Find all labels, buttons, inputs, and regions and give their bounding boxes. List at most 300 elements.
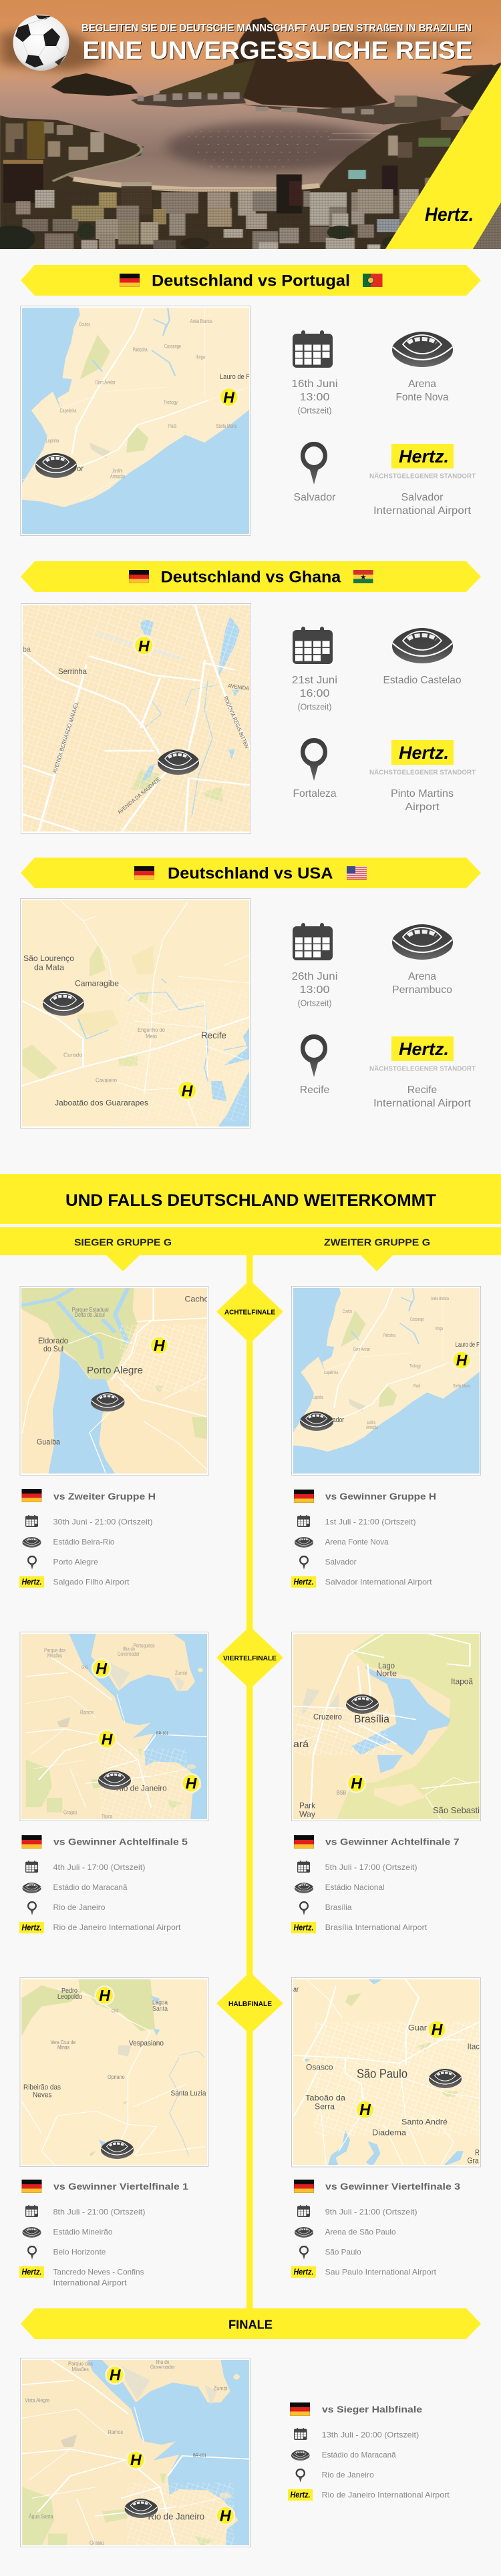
icon: calendar xyxy=(293,330,333,368)
city: Recife xyxy=(300,1084,329,1096)
banner xyxy=(21,265,481,296)
stadium name xyxy=(392,971,452,996)
Hertz logo: Hertz. xyxy=(399,743,449,763)
arrow: right column xyxy=(361,1255,393,1271)
map base Recife: da Mata xyxy=(34,962,64,972)
map base Recife: Camaragibe xyxy=(75,978,119,988)
city: Fortaleza xyxy=(293,788,337,799)
marker: stadium xyxy=(91,1392,124,1411)
Hertz logo: Hertz. xyxy=(290,2489,310,2500)
map base Fortaleza xyxy=(23,605,250,832)
map base Belo Horizonte: CNF xyxy=(112,2009,119,2014)
flag: Ghana xyxy=(353,570,373,583)
hero: Rio de Janeiro photo header xyxy=(0,0,501,252)
round marker: Viertelfinale: VIERTELFINALE xyxy=(223,1654,277,1662)
map base Brasília: Brasília xyxy=(354,1714,389,1725)
map base Salvador small: Itinga xyxy=(436,1327,443,1331)
map base Rio de Janeiro xyxy=(21,1634,207,1819)
panel: map Recife xyxy=(19,898,253,1128)
match heading: Deutschland vs Ghana xyxy=(161,569,341,586)
map base Belo Horizonte: Pedro xyxy=(61,1987,77,1995)
map base Rio de Janeiro: Ilha do xyxy=(123,1646,135,1652)
map base Salvador small: Armação xyxy=(366,1425,378,1430)
marker: stadium xyxy=(300,1411,333,1431)
map base Brasília: Norte xyxy=(376,1668,397,1678)
map base Salvador: Palestina xyxy=(133,347,148,352)
map base Brasília: Lago xyxy=(378,1661,395,1670)
icon: calendar xyxy=(293,627,333,664)
map base Salvador: Lapinha xyxy=(45,438,59,444)
stadium: Estádio do Maracanã xyxy=(322,2450,396,2459)
match details: vs Gewinner Viertelfinale 3 xyxy=(291,2180,460,2278)
flag: Germany xyxy=(294,1490,314,1503)
group winner heading: SIEGER GRUPPE G xyxy=(74,1237,172,1248)
section: Deutschland vs USA xyxy=(19,858,481,1128)
map base Rio de Janeiro Finale: Ramos xyxy=(108,2429,123,2435)
map base Salvador small: Palestina xyxy=(383,1333,395,1338)
date text: (Ortszeit) xyxy=(298,406,331,415)
map base Recife xyxy=(22,900,249,1126)
hero subtitle: BEGLEITEN SIE DIE DEUTSCHE MANNSCHAFT AUF DEN STRAßEN IN BRAZILIEN xyxy=(81,23,472,34)
Hertz wordmark in hero: Hertz. xyxy=(425,204,474,226)
map base Salvador: Coutos xyxy=(79,322,90,327)
marker: Hertz location 3 xyxy=(181,1773,201,1793)
date text: 16th Juni xyxy=(291,378,338,390)
marker: Hertz location 1: H xyxy=(96,1660,107,1677)
flag: Portugal xyxy=(363,274,382,287)
marker: Hertz location: H xyxy=(456,1351,468,1369)
map base Fortaleza: Serrinha xyxy=(58,667,87,676)
map base Rio de Janeiro: Grajaú xyxy=(63,1810,77,1815)
map base Recife: Jaboatão dos Guararapes xyxy=(55,1098,148,1108)
city: Salvador xyxy=(325,1557,357,1566)
map base Porto Alegre: Cacho xyxy=(184,1295,209,1304)
date: 13th Juli - 20:00 (Ortszeit) xyxy=(322,2430,419,2439)
date text xyxy=(291,378,338,415)
banner: Finale: FINALE xyxy=(228,2318,273,2332)
icon: stadium xyxy=(23,1537,41,1548)
map base Rio de Janeiro Finale: BR-101 xyxy=(193,2453,206,2459)
map base Salvador: Itinga xyxy=(196,354,205,360)
map base Rio de Janeiro: Tijuca xyxy=(102,1814,112,1819)
Hertz logo: Hertz. xyxy=(21,2266,41,2277)
airport xyxy=(373,492,472,517)
map base São Paulo: ar xyxy=(293,1986,299,1994)
date: 8th Juli - 21:00 (Ortszeit) xyxy=(53,2207,146,2216)
match title: vs Zweiter Gruppe H xyxy=(53,1491,156,1502)
map base Rio de Janeiro Finale: Zumbi xyxy=(214,2385,228,2392)
map base Belo Horizonte: Opriano xyxy=(108,2074,125,2080)
stadium: Arena de São Paulo xyxy=(325,2227,396,2236)
map base Porto Alegre: Porto Alegre xyxy=(87,1365,143,1376)
airport: Tancredo Neves - Confins xyxy=(53,2267,144,2276)
date: 9th Juli - 21:00 (Ortszeit) xyxy=(325,2207,418,2216)
marker: Hertz location xyxy=(176,1080,198,1101)
icon: calendar xyxy=(297,1861,310,1873)
marker: stadium xyxy=(98,1770,131,1790)
hero scene illustration xyxy=(0,0,501,249)
marker: stadium xyxy=(101,2140,134,2159)
map base São Paulo: Guar xyxy=(408,2023,427,2033)
marker: Hertz location xyxy=(134,635,154,656)
arrow: left column xyxy=(106,1255,140,1271)
marker: Hertz location 1 xyxy=(105,2365,125,2385)
map base Brasília: São Sebasti xyxy=(433,1805,480,1815)
marker: Hertz location 2 xyxy=(126,2450,146,2470)
map base Rio de Janeiro: Portuguesa xyxy=(134,1643,155,1648)
map base São Paulo: Taboão da xyxy=(305,2093,345,2102)
date text: (Ortszeit) xyxy=(298,702,331,711)
stadium name: Arena xyxy=(408,971,436,982)
city: Salvador xyxy=(294,492,336,503)
map base Salvador small: Trobogy xyxy=(409,1364,421,1369)
stadium name: Pernambuco xyxy=(392,984,452,996)
map base Salvador: Cassange xyxy=(164,343,181,350)
round marker: Achtelfinale: ACHTELFINALE xyxy=(224,1308,275,1316)
map base São Paulo: R xyxy=(475,2148,480,2157)
stadium name xyxy=(395,378,449,403)
Hertz logo xyxy=(391,740,454,765)
map base Belo Horizonte: Lagoa xyxy=(152,1999,168,2006)
map base São Paulo: Gra xyxy=(468,2156,479,2165)
knockout heading band: UND FALLS DEUTSCHLAND WEITERKOMMT xyxy=(65,1191,436,1210)
map base Salvador: Dom Avelar xyxy=(96,379,116,386)
icon: location pin xyxy=(301,738,327,781)
icon: pin xyxy=(299,1901,309,1915)
map base Rio de Janeiro Finale: Missões xyxy=(72,2366,89,2372)
marker: Hertz location 1: H xyxy=(432,2021,443,2038)
stadium: Estádio Nacional xyxy=(325,1883,385,1892)
icon: football xyxy=(13,15,69,71)
airport: Recife xyxy=(407,1084,437,1096)
date text: 16:00 xyxy=(299,688,330,699)
marker: Hertz location: H xyxy=(99,1987,110,2004)
section: Deutschland vs Portugal xyxy=(19,265,481,536)
map base Brasília: Park xyxy=(299,1801,316,1810)
date text: (Ortszeit) xyxy=(298,998,331,1008)
marker: Hertz location: H xyxy=(138,637,150,655)
marker: Hertz location 2: H xyxy=(130,2451,142,2469)
marker: Hertz location 2 xyxy=(355,2100,375,2120)
map base São Paulo: Itac xyxy=(468,2042,480,2051)
round marker: Halbfinale xyxy=(216,1972,283,2034)
date text: 13:00 xyxy=(299,392,330,403)
map base Fortaleza: ba xyxy=(23,645,31,654)
map base Belo Horizonte: Neves xyxy=(33,2091,52,2100)
tournament spine line xyxy=(246,1255,253,2310)
marker: Hertz location 1 xyxy=(92,1658,112,1678)
date text: 21st Juni xyxy=(292,675,337,686)
icon: stadium xyxy=(392,332,453,367)
map base Salvador small xyxy=(293,1288,480,1474)
icon: pin xyxy=(299,1556,309,1570)
icon: stadium xyxy=(291,2450,310,2461)
map base Salvador xyxy=(22,308,250,534)
airport: International Airport xyxy=(373,505,472,517)
airport: Rio de Janeiro International Airport xyxy=(53,1923,181,1932)
map base Brasília: Itapoã xyxy=(451,1676,473,1686)
map base Rio de Janeiro Finale: Ilha do xyxy=(156,2359,170,2365)
map base Salvador: or xyxy=(77,464,84,473)
marker: stadium xyxy=(158,749,199,775)
Hertz logo xyxy=(391,1036,454,1061)
panel: map Brasília xyxy=(291,1632,483,1822)
stadium name: Fonte Nova xyxy=(395,392,449,403)
map base Salvador small: Stella Maris xyxy=(453,1384,470,1389)
airport: Pinto Martins xyxy=(391,788,454,799)
flag: Germany xyxy=(120,274,140,287)
date text xyxy=(292,675,337,711)
flag: USA xyxy=(347,866,367,880)
map base Salvador: Capelinha xyxy=(60,408,77,414)
map base Rio de Janeiro Finale: Rio de Janeiro xyxy=(148,2511,204,2521)
map base Rio de Janeiro Finale: Água Santa xyxy=(29,2513,53,2520)
icon: stadium xyxy=(23,1883,41,1893)
map base Recife: São Lourenço xyxy=(23,954,74,963)
marker: Hertz location 3 xyxy=(215,2505,235,2525)
match title: vs Gewinner Achtelfinale 5 xyxy=(53,1837,188,1847)
map base Belo Horizonte: Santa Luzia xyxy=(171,2089,206,2098)
airport: Salvador International Airport xyxy=(325,1577,432,1586)
marker: Hertz location: H xyxy=(351,1775,362,1792)
map base Brasília xyxy=(293,1634,480,1819)
flag: Germany xyxy=(21,1489,41,1502)
airport xyxy=(373,1084,472,1109)
marker: stadium xyxy=(43,991,84,1016)
map base São Paulo: Santo André xyxy=(401,2117,448,2126)
map base Salvador: Trobogy xyxy=(164,399,178,406)
map base Belo Horizonte: Leopoldo xyxy=(57,1993,82,2001)
match details: vs Gewinner Achtelfinale 5 xyxy=(19,1835,188,1933)
map base Porto Alegre: Eldorado xyxy=(38,1336,68,1345)
Hertz logo: Hertz. xyxy=(21,1576,41,1587)
panel: map Salvador xyxy=(19,306,253,536)
map base Salvador small: Jardim xyxy=(367,1421,375,1425)
airport: International Airport xyxy=(53,2278,127,2287)
icon: calendar xyxy=(25,2205,38,2217)
date text xyxy=(291,971,338,1008)
map base Brasília: ará xyxy=(293,1738,309,1749)
marker: Hertz location 2: H xyxy=(359,2101,371,2118)
map base São Paulo: Diadema xyxy=(372,2128,406,2137)
icon: stadium xyxy=(392,924,453,960)
match title: vs Sieger Halbfinale xyxy=(322,2404,422,2414)
round marker: Halbfinale: HALBFINALE xyxy=(228,2000,272,2008)
date: 30th Juni - 21:00 (Ortszeit) xyxy=(53,1517,153,1526)
map base Recife: Meio xyxy=(146,1033,158,1040)
flag: Germany xyxy=(294,2180,314,2193)
marker: stadium xyxy=(35,453,77,478)
match title: vs Gewinner Viertelfinale 3 xyxy=(325,2181,460,2192)
panel: map Rio de Janeiro xyxy=(15,1628,216,1827)
marker: Hertz location xyxy=(95,1985,115,2005)
icon: pin xyxy=(27,1556,37,1570)
marker: stadium xyxy=(429,2069,462,2088)
map base Recife: Engenho do xyxy=(138,1027,166,1033)
map base São Paulo xyxy=(293,1979,480,2165)
map base Porto Alegre xyxy=(21,1288,209,1474)
group runner-up heading: ZWEITER GRUPPE G xyxy=(324,1237,430,1248)
map base Belo Horizonte: Vera Cruz de xyxy=(51,2039,76,2045)
map base Belo Horizonte: Minas xyxy=(57,2045,69,2050)
stadium: Estádio Beira-Rio xyxy=(53,1537,115,1546)
Hertz logo: Hertz. xyxy=(399,446,449,466)
date: 1st Juli - 21:00 (Ortszeit) xyxy=(325,1517,416,1526)
city: Rio de Janeiro xyxy=(53,1903,106,1912)
stadium name: Arena xyxy=(408,378,436,390)
map base Rio de Janeiro Finale: Governador xyxy=(150,2364,175,2370)
banner xyxy=(21,561,481,592)
city: Porto Alegre xyxy=(53,1557,98,1566)
match title: vs Gewinner Achtelfinale 7 xyxy=(325,1837,460,1847)
match details: vs Gewinner Gruppe H xyxy=(291,1490,436,1588)
map base Salvador small: Areia Branca xyxy=(431,1297,449,1301)
panel: map Porto Alegre xyxy=(19,1286,211,1477)
map base Salvador small: Coutos xyxy=(343,1309,352,1314)
group outcome band xyxy=(0,1227,501,1271)
match details: vs Sieger Halbfinale xyxy=(288,2402,450,2501)
marker: Hertz location 2 xyxy=(97,1729,117,1749)
yellow brand wedge xyxy=(385,65,501,249)
date text: 26th Juni xyxy=(291,971,338,982)
map base São Paulo: Serra xyxy=(315,2102,335,2112)
map base Rio de Janeiro: Rio de Janeiro xyxy=(116,1783,167,1793)
icon: pin xyxy=(27,2246,37,2260)
banner: Finale xyxy=(21,2308,481,2339)
panel: map São Paulo xyxy=(291,1977,483,2167)
stadium: Estádio Mineirão xyxy=(53,2227,113,2236)
map base Salvador: Stella Maris xyxy=(216,423,236,429)
flag: Germany xyxy=(21,1835,41,1849)
map base Salvador small: Capelinha xyxy=(324,1371,338,1375)
round marker: Viertelfinale xyxy=(216,1626,283,1689)
match title: vs Gewinner Gruppe H xyxy=(325,1491,436,1502)
map base Salvador small: Cassange xyxy=(410,1317,424,1322)
nearest location caption: NÄCHSTGELEGENER STANDORT xyxy=(369,768,476,777)
map base Salvador: Armação xyxy=(110,474,125,479)
marker: Hertz location 1: H xyxy=(110,2366,121,2384)
map base Salvador: Jardim xyxy=(112,468,123,474)
icon: calendar xyxy=(293,923,333,960)
map base Belo Horizonte: Vespasiano xyxy=(129,2039,164,2047)
marker: Hertz location xyxy=(218,387,239,407)
flag: Germany xyxy=(294,1835,314,1849)
map base Rio de Janeiro Finale: Parque das xyxy=(68,2361,93,2366)
marker: Hertz location xyxy=(149,1335,169,1355)
airport: International Airport xyxy=(373,1098,472,1109)
map base Porto Alegre: Parque Estadual xyxy=(72,1307,109,1313)
map base Fortaleza: AVENIDA xyxy=(228,683,250,691)
icon: calendar xyxy=(297,1515,310,1527)
map base Porto Alegre: Guaíba xyxy=(37,1437,60,1447)
map base Rio de Janeiro: BR-101 xyxy=(156,1731,168,1736)
flag: Germany xyxy=(21,2180,41,2193)
match heading: Deutschland vs USA xyxy=(168,865,333,882)
city: Brasília xyxy=(325,1903,352,1912)
map base Belo Horizonte: Santa xyxy=(152,2005,168,2013)
icon: pin xyxy=(27,1901,37,1915)
icon: stadium xyxy=(295,1537,313,1548)
map base Rio de Janeiro: Governador xyxy=(118,1651,140,1657)
airport: Salvador xyxy=(401,492,444,503)
Hertz logo: Hertz. xyxy=(21,1922,41,1933)
airport xyxy=(53,2267,144,2287)
marker: Hertz location: H xyxy=(182,1082,193,1100)
match heading: Deutschland vs Portugal xyxy=(152,272,350,290)
map base Salvador small: Lapinha xyxy=(313,1395,323,1400)
map base São Paulo: São Paulo xyxy=(357,2067,407,2081)
Hertz logo: Hertz. xyxy=(294,1576,314,1587)
map base Recife: Curado xyxy=(63,1052,83,1058)
map base Fortaleza: AVENIDA BERNARDO MANUEL xyxy=(51,701,80,774)
icon: calendar xyxy=(25,1515,38,1527)
icon: calendar xyxy=(25,1861,38,1873)
airport xyxy=(391,788,454,813)
panel: map Rio de Janeiro Finale xyxy=(9,2324,256,2569)
map base Salvador: Areia Branca xyxy=(190,318,212,324)
icon: stadium xyxy=(295,1883,313,1893)
marker: Hertz location 3: H xyxy=(220,2507,231,2524)
round marker: Achtelfinale xyxy=(216,1280,283,1343)
Hertz logo: Hertz. xyxy=(294,1922,314,1933)
map base Fortaleza: RODOVIA RÉGIS BITTEN xyxy=(222,695,250,749)
map base Rio de Janeiro Finale: Vista Alegre xyxy=(25,2397,50,2404)
map base Belo Horizonte: Ribeirão das xyxy=(23,2083,61,2091)
icon: location pin xyxy=(301,442,327,485)
map base Rio de Janeiro: Parque das xyxy=(44,1647,65,1654)
map base Belo Horizonte xyxy=(21,1979,207,2165)
marker: Hertz location xyxy=(452,1350,472,1370)
marker: stadium xyxy=(346,1694,379,1714)
map base Salvador: Piatã xyxy=(168,423,176,429)
city: Belo Horizonte xyxy=(53,2247,106,2256)
panel: map Salvador small xyxy=(291,1287,482,1476)
icon: calendar xyxy=(297,2205,310,2217)
hero title: EINE UNVERGESSLICHE REISE xyxy=(83,37,473,64)
nearest location caption: NÄCHSTGELEGENER STANDORT xyxy=(369,1064,476,1073)
map base Rio de Janeiro: Zumbi xyxy=(175,1670,187,1676)
icon: pin xyxy=(299,2246,309,2260)
stadium: Estádio do Maracanã xyxy=(53,1883,128,1892)
city: São Paulo xyxy=(325,2247,361,2256)
map base Salvador small: Dom Avelar xyxy=(353,1347,370,1352)
map base Brasília: BSB xyxy=(337,1790,346,1796)
marker: Hertz location 1 xyxy=(427,2019,447,2039)
marker: Hertz location: H xyxy=(223,388,234,406)
section: Deutschland vs Ghana xyxy=(19,561,481,833)
airport: Airport xyxy=(405,801,440,813)
map base Recife: Cavaleiro xyxy=(96,1077,118,1084)
map base Salvador small: ador xyxy=(333,1416,344,1424)
map base São Paulo: Osasco xyxy=(306,2062,333,2071)
map base Brasília: Way xyxy=(299,1810,315,1819)
marker: Hertz location 2: H xyxy=(102,1730,113,1748)
marker: stadium xyxy=(125,2499,158,2518)
knockout heading band xyxy=(0,1174,501,1224)
match details: vs Gewinner Achtelfinale 7 xyxy=(291,1835,460,1933)
map base Porto Alegre: do Sul xyxy=(43,1344,63,1353)
match details: vs Gewinner Viertelfinale 1 xyxy=(19,2180,188,2287)
stadium: Arena Fonte Nova xyxy=(325,1537,389,1546)
marker: Hertz location: H xyxy=(154,1337,165,1354)
airport: Brasília International Airport xyxy=(325,1923,428,1932)
map base Rio de Janeiro Finale xyxy=(22,2359,249,2546)
marker: Hertz location xyxy=(346,1773,366,1793)
icon: stadium xyxy=(295,2227,313,2238)
airport: Salgado Filho Airport xyxy=(53,1577,130,1586)
date: 4th Juli - 17:00 (Ortszeit) xyxy=(53,1863,146,1872)
banner xyxy=(21,858,481,888)
